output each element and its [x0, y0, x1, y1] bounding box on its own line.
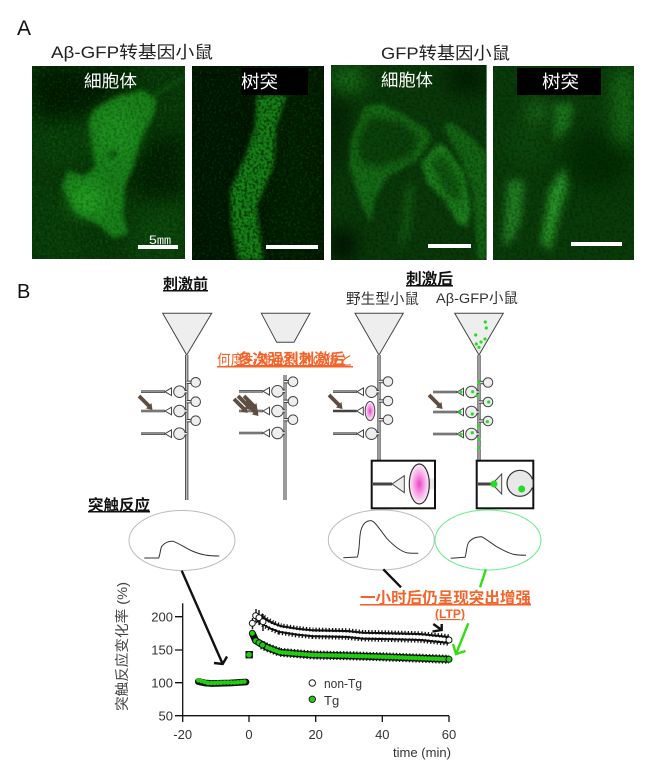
callout: enhancement persists after one hour: 一小时后仍呈现突出增强	[360, 588, 531, 607]
connector: wild-type response to chart	[383, 569, 401, 587]
y tick labels	[151, 610, 173, 724]
label box	[517, 68, 601, 95]
response trace: Aβ-GFP after stimulation	[435, 510, 541, 570]
inset: enlarged spine with pink potentiation	[372, 461, 435, 508]
neuron: before stimulation	[139, 313, 212, 500]
neuron: repeated strong stimulation	[234, 313, 310, 500]
micrograph: Aβ-GFP dendrite	[192, 66, 324, 260]
x tick labels	[173, 727, 456, 742]
label: wild-type mouse: 野生型小鼠	[346, 291, 419, 308]
arrow: before response to baseline	[182, 571, 227, 664]
x tick labels: 0	[245, 727, 253, 742]
label: Aβ-GFP mouse: Aβ-GFP小鼠	[436, 290, 518, 306]
y axis title: 突触反应变化率 (%)	[114, 582, 130, 711]
y tick labels: 100	[151, 676, 173, 690]
baseline points	[198, 680, 246, 684]
micrograph: GFP dendrite	[493, 66, 634, 260]
panel label: A: A	[17, 17, 31, 40]
enlarged spine	[365, 402, 375, 420]
arrow: stimulus	[139, 396, 152, 410]
connector: Aβ-GFP response to chart	[480, 569, 486, 587]
chart: synaptic response over time	[114, 582, 456, 760]
x tick labels: -20	[173, 727, 192, 742]
caption: repeated strong stimulation (overlaid): 多次强烈刺激后	[237, 350, 345, 368]
series: non-Tg	[249, 609, 452, 643]
time-zero point	[246, 651, 253, 658]
y tick labels: 150	[151, 642, 173, 658]
legend: non-Tg	[324, 676, 362, 691]
series: Tg	[249, 630, 452, 662]
arrows: repeated stimuli	[234, 396, 258, 416]
micrograph: GFP soma	[331, 65, 487, 260]
neuron: Aβ-GFP after stimulation	[429, 313, 503, 461]
y tick labels: 200	[151, 610, 173, 624]
caption: repeated strong stimulation (overlaid): 何度も強い刺激の後と	[217, 352, 353, 369]
x tick labels: 20	[308, 727, 323, 742]
heading: before stimulation: 刺激前	[163, 275, 208, 293]
green Aβ-GFP particles	[458, 320, 490, 450]
x tick labels: 60	[442, 727, 456, 742]
legend	[309, 676, 362, 708]
scale bar	[428, 244, 471, 248]
response trace: before stimulation	[129, 510, 235, 570]
heading: GFP transgenic mouse: GFP转基因小鼠	[381, 44, 510, 63]
label: dendrite: 树突	[542, 72, 579, 92]
arrow: stimulus	[429, 395, 442, 409]
arrow: wild-type LTP endpoint	[432, 624, 442, 632]
heading: Aβ-GFP transgenic mouse: Aβ-GFP转基因小鼠	[51, 43, 213, 62]
axes	[175, 603, 449, 722]
scale bar	[138, 245, 178, 249]
scale label: 5 mm: 5㎜	[149, 233, 171, 247]
neuron: wild-type after stimulation	[329, 313, 403, 461]
panel label: B: B	[17, 281, 30, 303]
callout: LTP: (LTP)	[435, 609, 465, 621]
x axis title: time (min)	[393, 745, 451, 760]
label box	[242, 68, 308, 95]
arrow: Aβ-GFP LTP endpoint	[453, 623, 468, 654]
arrow: stimulus	[329, 395, 342, 409]
response trace: wild-type after stimulation	[328, 510, 434, 570]
label: soma: 細胞体	[381, 71, 433, 90]
label: soma: 細胞体	[84, 72, 137, 91]
inset: spine with green Aβ-GFP particles	[477, 461, 533, 508]
label: dendrite: 树突	[241, 72, 278, 92]
heading: after stimulation: 刺激后	[406, 270, 453, 288]
legend: Tg	[324, 693, 339, 708]
scale bar	[266, 245, 318, 249]
scale bar	[571, 242, 622, 246]
y tick labels: 50	[159, 708, 173, 724]
micrograph: Aβ-GFP soma	[32, 66, 185, 259]
x tick labels: 40	[375, 727, 390, 742]
heading: synaptic response: 突触反应	[88, 496, 150, 514]
